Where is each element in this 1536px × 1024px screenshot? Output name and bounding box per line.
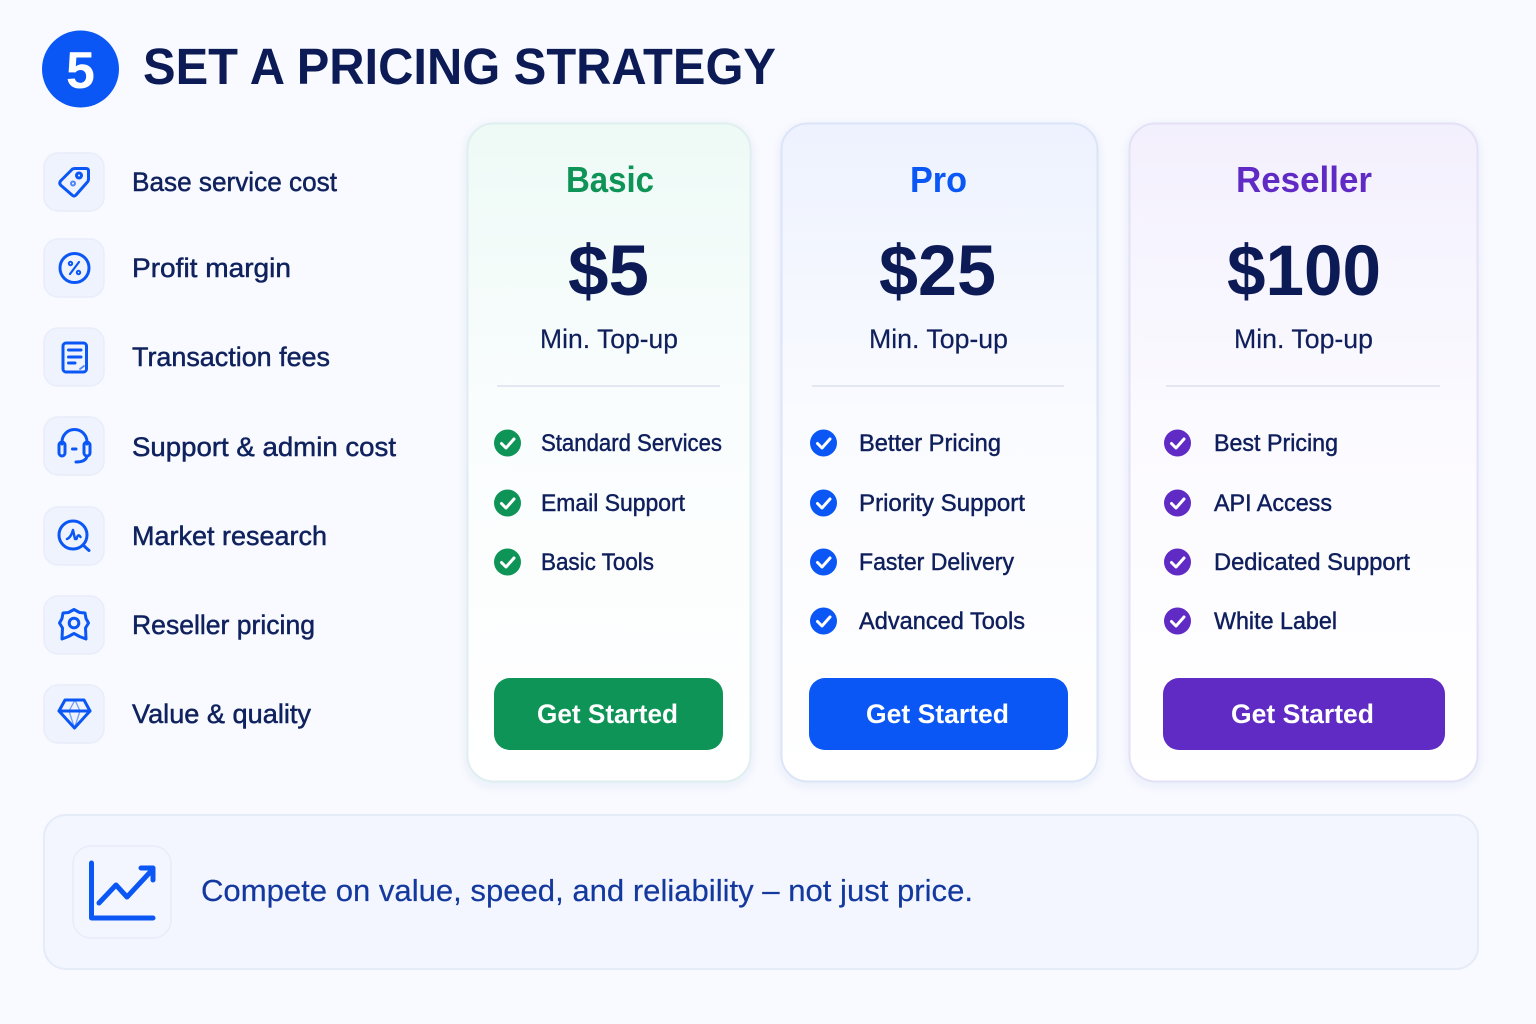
panel: Reseller plan xyxy=(1130,124,1478,782)
feature list: Advanced Tools xyxy=(859,608,1025,635)
callout: compete on value xyxy=(44,815,1478,969)
feature list: White Label xyxy=(1214,608,1337,635)
feature list: API Access xyxy=(1214,490,1332,517)
button xyxy=(809,678,1068,750)
panel: Basic plan xyxy=(468,124,750,782)
factor: value and quality: Value & quality xyxy=(132,699,311,729)
button xyxy=(1163,678,1445,750)
factor: reseller pricing xyxy=(44,596,315,654)
feature list: Faster Delivery xyxy=(859,549,1014,576)
feature list: Best Pricing xyxy=(1214,430,1338,457)
price: $5 xyxy=(568,232,649,311)
factor: support and admin cost xyxy=(44,417,397,475)
button: Get Started xyxy=(537,699,678,729)
step number badge xyxy=(42,30,119,108)
panel: Pro plan xyxy=(782,124,1098,782)
header: step number and title xyxy=(42,30,776,108)
card background xyxy=(782,124,1098,782)
plan name: Basic xyxy=(566,159,654,200)
card background xyxy=(1130,124,1478,782)
factor: base service cost: Base service cost xyxy=(132,167,337,197)
feature list xyxy=(494,430,722,576)
factor: market research: Market research xyxy=(132,521,327,551)
card background xyxy=(468,124,750,782)
factor: profit margin xyxy=(44,239,291,297)
plan name: Reseller xyxy=(1236,159,1372,200)
callout background xyxy=(44,815,1478,969)
plan name: Pro xyxy=(910,159,967,200)
feature list: Better Pricing xyxy=(859,430,1001,457)
factor: market research xyxy=(44,507,327,565)
feature list: Standard Services xyxy=(541,430,722,457)
panel: pricing factors list xyxy=(44,153,397,743)
button: Get Started xyxy=(866,699,1009,729)
feature list: Email Support xyxy=(541,490,685,517)
title: SET A PRICING STRATEGY xyxy=(143,38,776,95)
icon: rising line chart xyxy=(73,846,171,938)
factor: support and admin cost: Support & admin cost xyxy=(132,432,397,462)
factor: transaction fees xyxy=(44,328,330,386)
step number badge: 5 xyxy=(66,42,95,100)
factor: value and quality xyxy=(44,685,311,743)
factor: base service cost xyxy=(44,153,337,211)
factor: profit margin: Profit margin xyxy=(132,253,291,283)
price: $25 xyxy=(879,232,996,311)
feature list xyxy=(1164,430,1410,635)
feature list: Dedicated Support xyxy=(1214,549,1410,576)
feature list: Priority Support xyxy=(859,490,1025,517)
price caption: Min. Top-up xyxy=(540,324,678,354)
button: Get Started xyxy=(1231,699,1374,729)
factor: transaction fees: Transaction fees xyxy=(132,342,330,372)
price caption: Min. Top-up xyxy=(1234,324,1373,354)
factor: reseller pricing: Reseller pricing xyxy=(132,610,315,640)
price caption: Min. Top-up xyxy=(869,324,1008,354)
feature list xyxy=(810,430,1025,635)
price: $100 xyxy=(1227,232,1381,311)
feature list: Basic Tools xyxy=(541,549,654,576)
callout text: Compete on value, speed, and reliability – not just price. xyxy=(201,873,973,908)
button xyxy=(494,678,723,750)
